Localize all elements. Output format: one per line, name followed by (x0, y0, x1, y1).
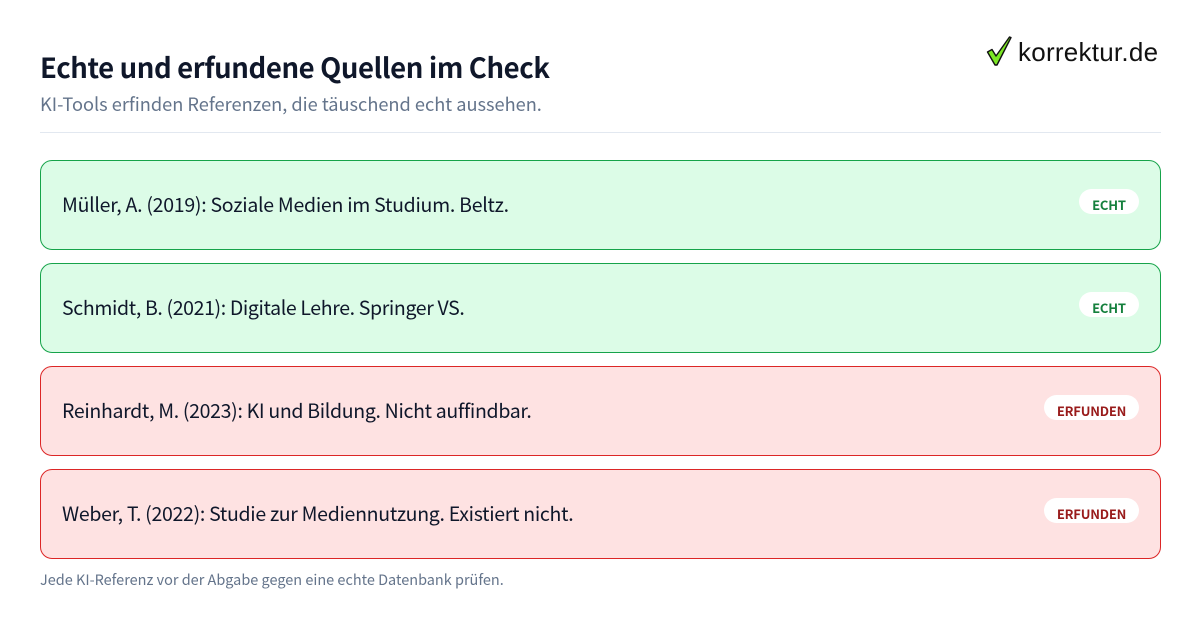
badge (1079, 189, 1139, 214)
badge: ECHT (1092, 298, 1126, 317)
panel: reference 3 (40, 366, 1161, 456)
wordmark: korrektur.de (1018, 37, 1158, 67)
reference text: Müller, A. (2019): Soziale Medien im Studium. Beltz. (62, 189, 509, 218)
reference text: Schmidt, B. (2021): Digitale Lehre. Springer VS. (62, 292, 464, 321)
badge (1044, 395, 1139, 420)
reference text: Reinhardt, M. (2023): KI und Bildung. Nicht auffindbar. (62, 395, 532, 424)
badge: ERFUNDEN (1057, 504, 1126, 523)
panel: reference 2 (40, 263, 1161, 353)
badge: ERFUNDEN (1057, 401, 1126, 420)
badge: ECHT (1092, 195, 1126, 214)
badge (1079, 292, 1139, 317)
reference text: Weber, T. (2022): Studie zur Mediennutzung. Existiert nicht. (62, 498, 573, 527)
title: Echte und erfundene Quellen im Check (40, 46, 550, 86)
icon: check mark (986, 36, 1012, 66)
panel: reference 4 (40, 469, 1161, 559)
subtitle: KI-Tools erfinden Referenzen, die täuschend echt aussehen. (40, 91, 542, 117)
footnote: Jede KI-Referenz vor der Abgabe gegen eine echte Datenbank prüfen. (40, 569, 504, 590)
logo (986, 36, 1158, 67)
panel: reference 1 (40, 160, 1161, 250)
badge (1044, 498, 1139, 523)
